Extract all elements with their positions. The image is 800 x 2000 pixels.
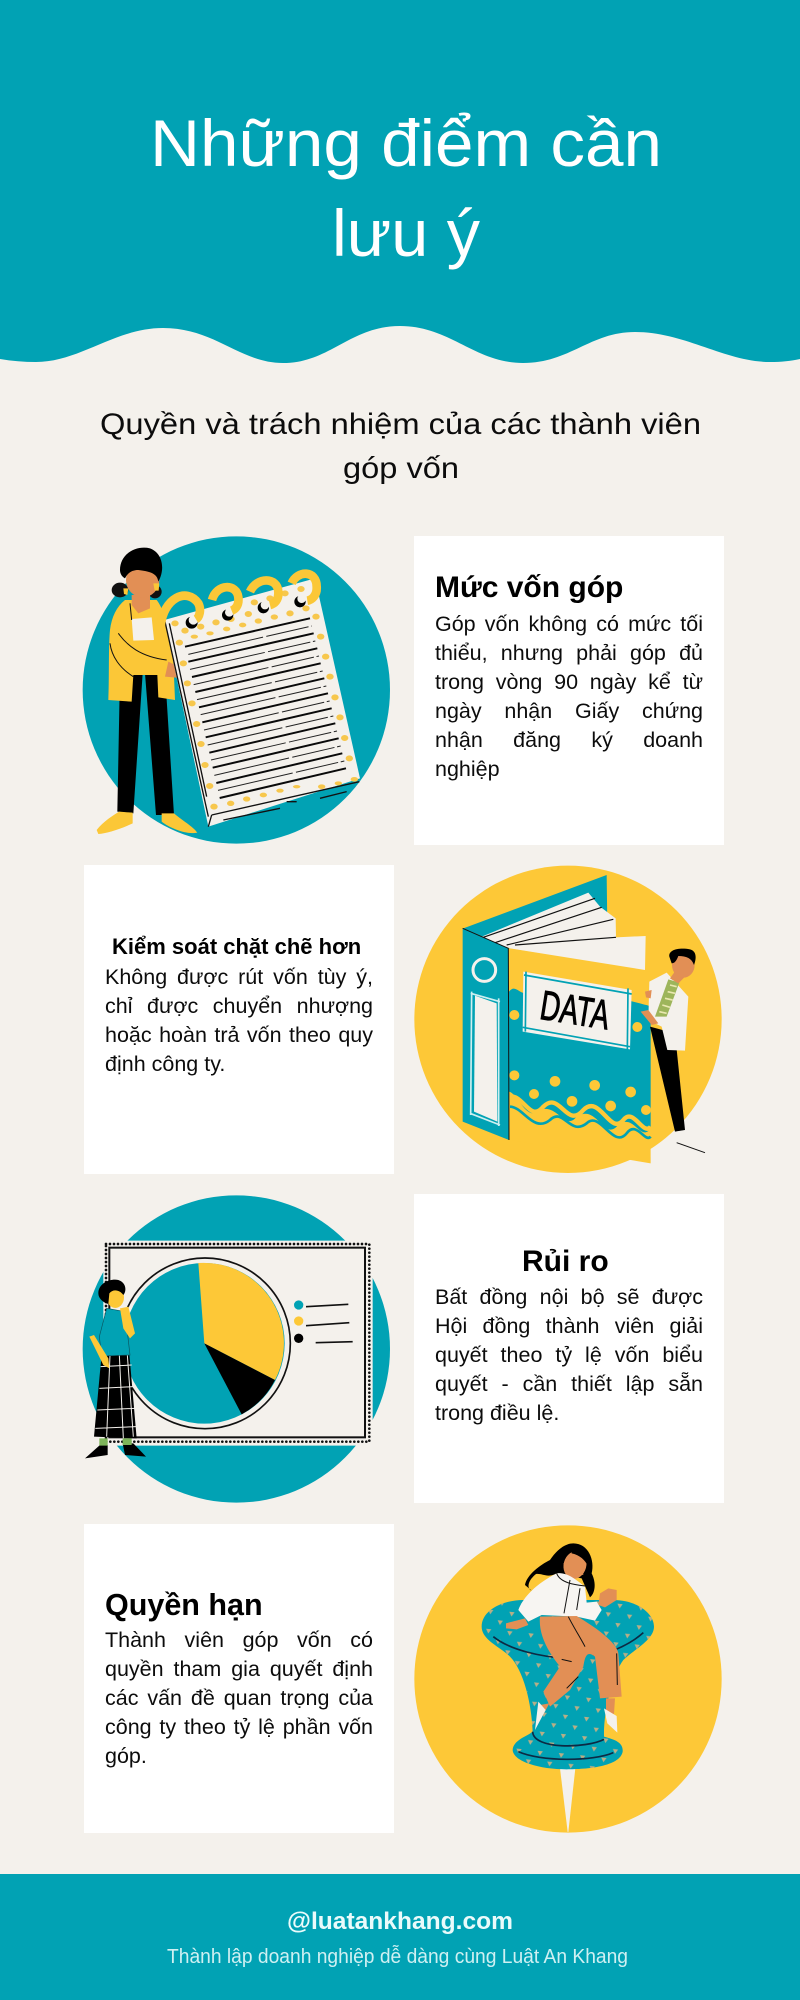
illustration: woman with notebook: [83, 536, 390, 844]
text block: powers: Thành viên góp vốn có: [105, 1628, 373, 1652]
footer text: Thành lập doanh nghiệp dễ dàng cùng Luật An Khang: [167, 1945, 628, 1968]
footer text: @luatankhang.com: [287, 1908, 513, 1935]
panel: stricter control: [84, 865, 394, 1174]
text block: powers: công ty theo tỷ lệ phần vốn: [105, 1715, 373, 1739]
icon: data label: [523, 972, 632, 1049]
text block: stricter control: chỉ được chuyển nhượng: [105, 994, 373, 1018]
subtitle: [100, 408, 701, 485]
panel: capital contribution: [414, 536, 724, 845]
text block: stricter control: hoặc hoàn trả vốn theo quy: [105, 1023, 373, 1047]
subtitle: Quyền và trách nhiệm của các thành viên: [100, 408, 701, 441]
heading: risks: Rủi ro: [522, 1245, 609, 1278]
text block: capital level: ngày nhận Giấy chứng: [435, 699, 703, 723]
footer text: [167, 1908, 628, 1968]
title: Những điểm cần: [150, 106, 662, 180]
panel: risks: [414, 1194, 724, 1503]
text block: powers: [105, 1628, 373, 1768]
illustration: pie chart board with person: [83, 1195, 390, 1503]
text block: risks: [435, 1285, 703, 1425]
icon: notebook rings: [161, 574, 317, 629]
icon: board: [103, 1241, 373, 1446]
text block: stricter control: [105, 965, 373, 1076]
text block: stricter control: định công ty.: [105, 1052, 225, 1076]
text block: risks: quyết - cần thiết lập sẵn: [435, 1372, 703, 1396]
icon: man in white coat: [641, 949, 705, 1153]
icon: notebook page: [164, 578, 360, 827]
icon: thinking person: [85, 1280, 146, 1458]
title: lưu ý: [332, 196, 480, 270]
footer band: [0, 1874, 800, 2000]
icon: push pin: [482, 1600, 654, 1832]
text block: capital level: nghiệp: [435, 757, 500, 781]
icon: seated woman: [506, 1543, 622, 1733]
text block: risks: quyết theo tỷ lệ vốn biểu: [435, 1343, 703, 1367]
text block: capital level: [435, 612, 703, 781]
text block: powers: các vấn đề quan trọng của: [105, 1686, 373, 1710]
icon: person jacket and legs: [97, 548, 197, 834]
subtitle: góp vốn: [343, 452, 459, 485]
icon: data label: DATA: [537, 982, 613, 1038]
text block: powers: quyền tham gia quyết định: [105, 1657, 373, 1681]
text block: capital level: nhận đăng ký doanh: [435, 728, 703, 752]
text block: risks: trong điều lệ.: [435, 1401, 559, 1425]
illustration: data binder with man: [414, 866, 722, 1173]
header banner with wave: [0, 0, 800, 363]
text block: capital level: thiểu, nhưng phải góp đủ: [435, 641, 703, 665]
panel: powers: [84, 1524, 394, 1833]
pie chart: [120, 1258, 290, 1429]
text block: powers: góp.: [105, 1744, 147, 1768]
text block: risks: Hội đồng thành viên giải: [435, 1314, 703, 1338]
text block: capital level: trong vòng 90 ngày kể từ: [435, 670, 703, 694]
heading: capital level: Mức vốn góp: [435, 571, 623, 604]
text block: stricter control: Không được rút vốn tùy ý,: [105, 965, 373, 989]
legend: [294, 1300, 353, 1343]
heading: stricter control: Kiểm soát chặt chẽ hơn: [112, 934, 361, 958]
icon: binder: [463, 875, 651, 1163]
heading: powers: Quyền hạn: [105, 1588, 263, 1622]
text block: risks: Bất đồng nội bộ sẽ được: [435, 1285, 703, 1309]
text block: capital level: Góp vốn không có mức tối: [435, 612, 703, 636]
illustration: woman sitting on push pin: [414, 1525, 722, 1833]
title: [150, 106, 662, 270]
